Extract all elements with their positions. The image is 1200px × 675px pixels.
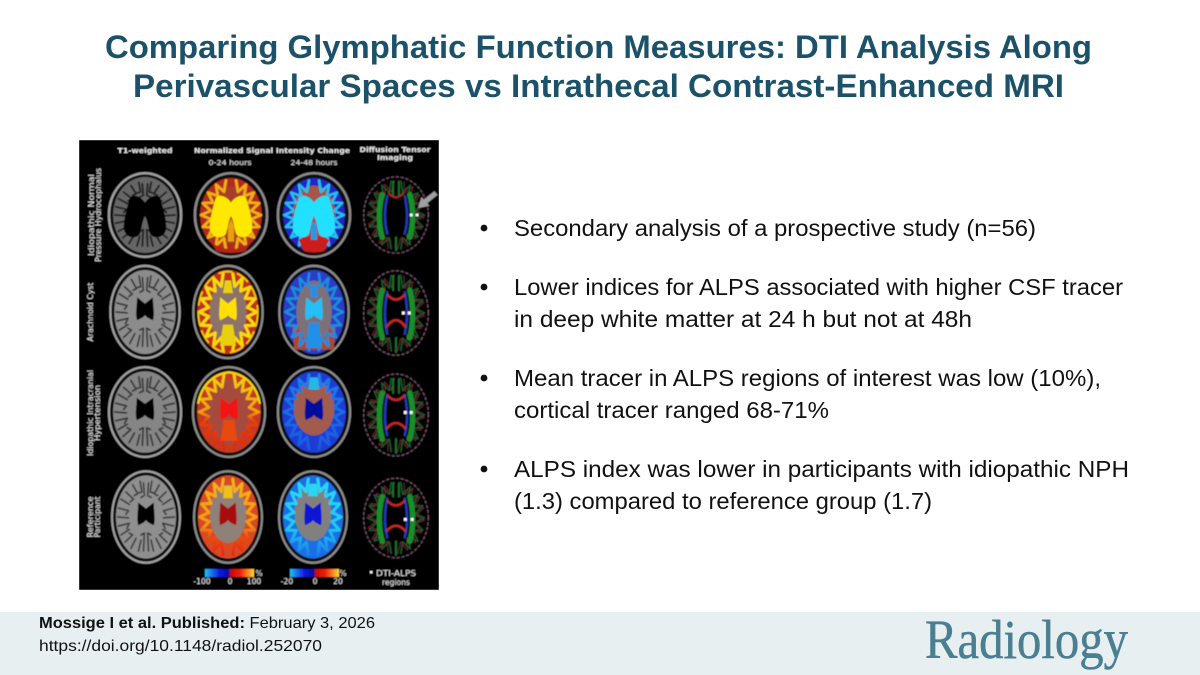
- bullet 4: ALPS index was lower in participants with idiopathic NPH: [514, 456, 1129, 482]
- row labels: Hypertension: [93, 385, 102, 441]
- row labels: Idiopathic Intracranial: [86, 370, 95, 456]
- 24-48h brain: intracranial hypertension: [278, 367, 350, 457]
- column headers: 24-48 hours: [290, 158, 338, 167]
- 0-24h brain: arachnoid cyst: [193, 266, 263, 358]
- bullet 4: [481, 456, 1129, 514]
- T1 brain: hydrocephalus: [109, 173, 181, 257]
- colour scale: 0-24 hours: 100: [247, 577, 261, 586]
- title: Comparing Glymphatic Function Measures: DTI Analysis Along: [105, 29, 1092, 65]
- citation: https://doi.org/10.1148/radiol.252070: [39, 638, 322, 655]
- colour scale: 24-48 hours: %: [339, 569, 347, 578]
- T1 brain: arachnoid cyst: [110, 266, 180, 358]
- column headers: Normalized Signal Intensity Change: [194, 146, 350, 155]
- bullet 3: [481, 365, 1101, 423]
- bullet 3: cortical tracer ranged 68-71%: [514, 397, 829, 423]
- colour scale: 24-48 hours: [281, 569, 347, 586]
- bullet 1: Secondary analysis of a prospective study (n=56): [514, 215, 1036, 241]
- DTI brain: hydrocephalus: [364, 177, 428, 253]
- title: Perivascular Spaces vs Intrathecal Contrast-Enhanced MRI: [133, 68, 1064, 104]
- citation: Mossige I et al. Published: February 3, 2026: [39, 615, 375, 632]
- colour scale: 24-48 hours: 0: [313, 577, 318, 586]
- column headers: T1-weighted: [118, 146, 172, 155]
- bullet 4: (1.3) compared to reference group (1.7): [514, 488, 932, 514]
- legend: DTI-ALPS regions: [370, 569, 416, 587]
- footer band: [0, 609, 1200, 675]
- legend: DTI-ALPS regions: regions: [382, 578, 410, 587]
- bullet 2: in deep white matter at 24 h but not at 48h: [514, 306, 972, 332]
- row labels: Participant: [93, 496, 102, 538]
- DTI brain: intracranial hypertension: [364, 374, 428, 456]
- colour scale: 0-24 hours: -100: [193, 577, 211, 586]
- column headers: [118, 145, 431, 167]
- legend: DTI-ALPS regions: DTI-ALPS: [376, 569, 416, 578]
- colour scale: 24-48 hours: 20: [333, 577, 343, 586]
- panel: brain imaging figure: [79, 140, 439, 590]
- citation: [39, 615, 375, 655]
- colour scale: 24-48 hours: -20: [281, 577, 293, 586]
- 0-24h brain: intracranial hypertension: [193, 367, 265, 457]
- row labels: Arachnoid Cyst: [86, 282, 95, 342]
- colour scale: 0-24 hours: %: [255, 569, 263, 578]
- 24-48h brain: arachnoid cyst: [279, 266, 349, 358]
- column headers: Diffusion Tensor: [360, 145, 431, 154]
- column headers: 0-24 hours: [208, 158, 252, 167]
- bullet 2: [481, 274, 1123, 332]
- title: [105, 29, 1092, 104]
- colour scale: 0-24 hours: [193, 569, 263, 586]
- 0-24h brain: hydrocephalus: [195, 173, 267, 257]
- column headers: Imaging: [377, 153, 413, 162]
- 24-48h brain: hydrocephalus: [278, 173, 350, 257]
- colour scale: 0-24 hours: 0: [228, 577, 233, 586]
- row labels: Pressure Hydrocephalus: [94, 168, 103, 262]
- row labels: Reference: [86, 496, 95, 538]
- T1 brain: reference participant: [112, 471, 180, 563]
- bullet 2: Lower indices for ALPS associated with higher CSF tracer: [514, 274, 1123, 300]
- Radiology logo: Radiology: [925, 609, 1128, 670]
- 0-24h brain: reference participant: [194, 471, 262, 563]
- row labels: [86, 168, 103, 538]
- bullet list: [481, 215, 1129, 514]
- T1 brain: intracranial hypertension: [109, 367, 181, 457]
- DTI brain: reference participant: [364, 478, 428, 558]
- row labels: Idiopathic Normal: [87, 174, 96, 256]
- icon: grey arrow pointing at ALPS region: [418, 191, 438, 208]
- 24-48h brain: reference participant: [279, 471, 347, 563]
- bullet 3: Mean tracer in ALPS regions of interest was low (10%),: [514, 365, 1101, 391]
- DTI brain: arachnoid cyst: [364, 271, 428, 355]
